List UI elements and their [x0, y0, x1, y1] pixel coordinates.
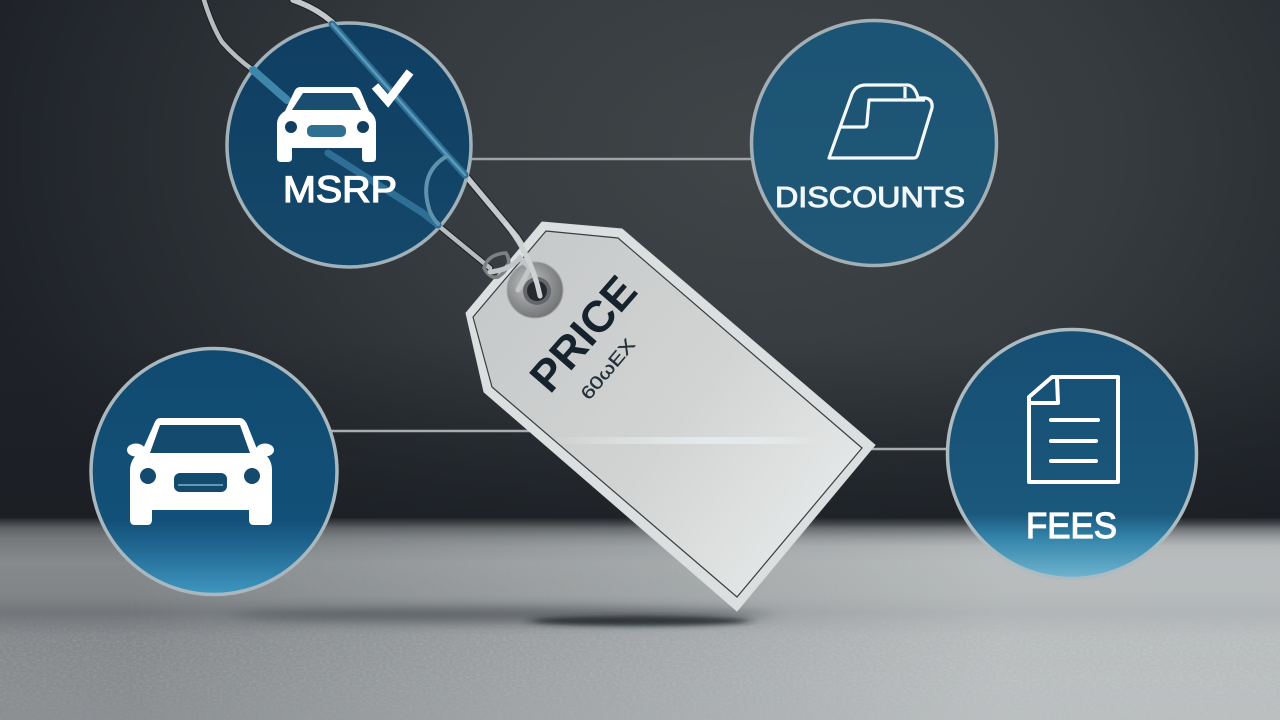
- wire through grommet: [506, 224, 540, 296]
- tag light glint: [550, 437, 820, 444]
- metal wire loop behind the circle: [204, 0, 540, 296]
- circle disc: Fees: [948, 330, 1196, 578]
- connector line: tag to Fees: [870, 448, 958, 450]
- connector line: MSRP to Discounts: [470, 158, 752, 160]
- circle disc: car: [91, 348, 337, 594]
- icon: car with check mark: [277, 72, 410, 162]
- text: garbled sub-label: 60ωEX: [577, 335, 639, 404]
- circle: Fees: [948, 330, 1196, 578]
- grommet: [507, 262, 563, 318]
- circle: car: [91, 348, 337, 594]
- circle disc: MSRP: [227, 23, 471, 267]
- icon: car front: [127, 418, 274, 525]
- text: PRICE: PRICE: [521, 267, 647, 402]
- label: Discounts: DISCOUNTS: [775, 182, 965, 214]
- icon: folder: [829, 85, 932, 158]
- tag body: [466, 222, 875, 611]
- label: Fees: FEES: [1026, 505, 1117, 546]
- tag shadow on floor: [230, 607, 770, 626]
- circle: MSRP: [227, 23, 471, 267]
- price tag: [466, 222, 875, 611]
- icon: document: [1029, 377, 1118, 482]
- tag inner border: [473, 231, 862, 597]
- textured floor: [0, 518, 1280, 720]
- circle: Discounts: [752, 20, 996, 266]
- connector line: car to tag: [318, 430, 532, 432]
- circle disc: Discounts: [752, 20, 996, 266]
- split ring clasp: [484, 253, 530, 290]
- label: MSRP: MSRP: [283, 169, 397, 210]
- wire seen through the MSRP circle: [253, 24, 465, 225]
- background wall: [0, 0, 1280, 530]
